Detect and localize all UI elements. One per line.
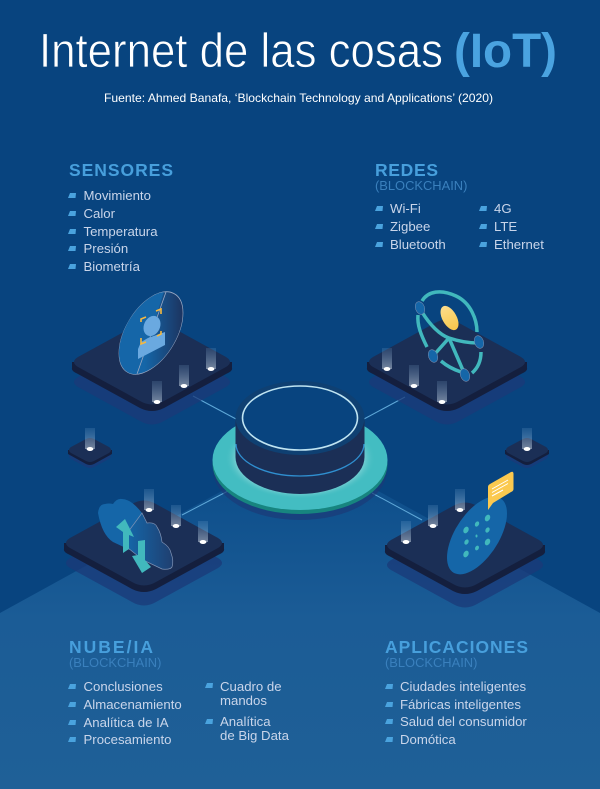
panel: sensores text [68,160,173,274]
panel: redes text: (BLOCKCHAIN) [375,178,467,193]
icon: speech bubble [488,472,514,510]
panel: aplicaciones text: Domótica [400,732,456,747]
panel: nube text: Conclusiones [84,679,163,694]
connector lines [182,396,422,520]
icon: network ring [414,292,485,383]
panel: nube text: Cuadro de [220,679,282,694]
panel: sensores text: Movimiento [84,188,151,203]
panel: nube text: Almacenamiento [84,697,182,712]
panel: aplicaciones text: (BLOCKCHAIN) [385,655,477,670]
panel: redes text: Zigbee [390,219,430,234]
panel: nube text: Analítica [220,714,271,729]
panel: redes text: Wi-Fi [390,201,421,216]
panel: redes text [375,160,544,252]
platform: small right [505,428,549,468]
panel: redes text: LTE [494,219,517,234]
platform: small left [68,428,112,468]
title: Internet de las cosas [39,25,443,78]
panel: sensores text: SENSORES [69,160,173,180]
panel: sensores text: Temperatura [84,224,158,239]
central hub [212,381,388,520]
icon: smart device disc [447,472,514,590]
panel: sensores text: Presión [84,241,128,256]
platform: sensores [72,277,232,424]
source line: Fuente: Ahmed Banafa, ‘Blockchain Technology and Applications’ (2020) [104,91,493,105]
panel: aplicaciones text [385,637,528,747]
icon: sensor beams [401,489,465,544]
platform: nube [64,489,224,606]
panel: redes text: 4G [494,201,512,216]
panel: aplicaciones text: APLICACIONES [385,637,528,657]
panel: sensores text: Calor [84,206,116,221]
icon: sensor beams [144,489,208,544]
icon: biometric disc [118,291,184,375]
panel: redes text: Ethernet [494,237,544,252]
platform: redes [367,292,527,424]
panel: nube text: (BLOCKCHAIN) [69,655,161,670]
hub top ring [242,386,358,450]
panel: sensores text: Biometría [84,259,141,274]
hub cylinder [236,418,364,494]
panel: nube text [68,637,290,747]
panel: aplicaciones text: Ciudades inteligentes [400,679,527,694]
panel: nube text: de Big Data [220,728,290,743]
panel: aplicaciones text: Fábricas inteligentes [400,697,521,712]
hub glow [225,417,375,499]
title: (IoT) [454,25,557,78]
panel: nube text: mandos [220,693,267,708]
panel: nube text: NUBE/IA [69,637,153,657]
hub shadow [213,420,387,520]
hub teal base [212,414,388,514]
panel: nube text: Procesamiento [84,732,171,747]
panel: aplicaciones text: Salud del consumidor [400,714,527,729]
platform: aplicaciones [385,472,545,608]
panel: nube text: Analítica de IA [84,715,169,730]
panel: redes text: REDES [375,160,438,180]
icon: sensor beams [382,348,447,404]
icon: cloud with arrows [98,499,173,573]
panel: redes text: Bluetooth [390,237,446,252]
lighter floor area [0,448,600,789]
icon: sensor beams [152,348,216,404]
